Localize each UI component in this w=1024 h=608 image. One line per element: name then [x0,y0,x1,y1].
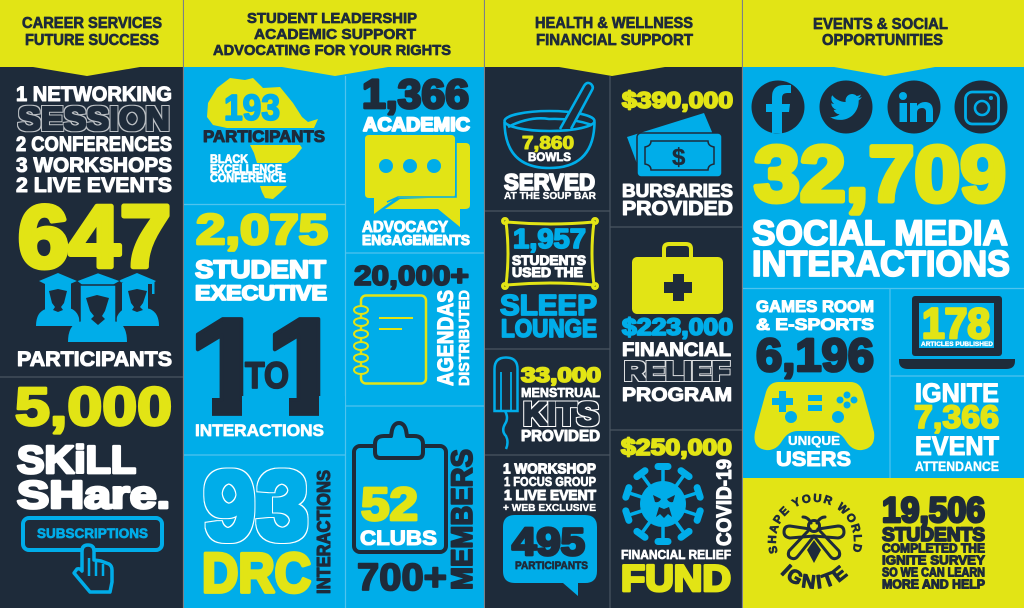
map: africa with black excellence conference: PARTICIPANTS [203,127,325,146]
stat: 6,196 games room: & E-SPORTS [756,315,874,334]
event list [16,82,172,197]
stat: 93 DRC interactions: 93 [203,450,309,561]
icon: virus [626,466,700,542]
stat: 93 DRC interactions: DRC [202,541,311,604]
stat: 93 DRC interactions [202,450,334,604]
stat: 6,196 games room: UNIQUE [788,433,840,448]
stat: soup bar bowls: SERVED [504,169,595,195]
stat: ignite event attendance: IGNITE [915,378,999,408]
text: survey result: MORE AND HELP [882,578,985,592]
stat: soup bar bowls [504,83,596,202]
header: health and wellness [485,0,743,76]
column 2: student leadership [184,0,485,608]
stat: 6,196 games room: GAMES ROOM [756,297,874,316]
button: subscriptions: SUBSCRIPTIONS [37,525,148,541]
icon: tampon [494,358,518,449]
icon: laptop [899,296,1015,369]
stat: 2,075 student executive: EXECUTIVE [195,281,327,305]
icon: facebook [752,80,804,134]
header: events and social: OPPORTUNITIES [822,32,943,49]
logo: shape your world ignite: SHAPE YOUR WORLD [768,494,862,554]
header: student leadership: ADVOCATING FOR YOUR RIGHTS [213,42,451,59]
stat: sleep lounge: LOUNGE [501,315,597,343]
stat: $223,000 financial relief program: $223,000 [622,314,733,341]
event list: 3 WORKSHOPS [16,153,172,177]
stat: $223,000 financial relief program: PROGRAM [622,384,732,406]
stat: 32,709 social media interactions [752,129,1010,284]
stat: ignite event attendance: EVENT [915,431,999,461]
stat: $250,000 covid-19 relief fund: $250,000 [621,434,732,460]
column 1: career services [0,0,184,608]
column 4: events and social [743,0,1024,608]
header: health and wellness: HEALTH & WELLNESS [535,15,693,32]
stat: 1,366 academic advocacy [362,71,470,249]
stat: $250,000 covid-19 relief fund: FUND [621,558,731,599]
icon: clipboard [354,423,446,552]
icon: twitter [820,80,872,134]
stat: 6,196 games room: 6,196 [756,329,874,381]
stat: 1,366 academic advocacy: ENGAGEMENTS [362,233,470,249]
stat: 5,000 skill share [15,377,172,517]
stat: 20,000+ agendas distributed: AGENDAS [433,290,458,386]
icon: graduates [36,273,159,342]
stat: sleep lounge [500,218,598,343]
stat: sleep lounge: 1,957 [513,223,586,254]
stat: 1 to 1 interactions [186,290,345,444]
stat: 495 participants: 1 WORKSHOP [503,462,596,478]
stat: 178 articles published: ARTICLES PUBLISHED [921,341,993,348]
stat: $390,000 bursaries [622,87,733,220]
map: africa with black excellence conference: BLACK [210,154,249,166]
stat: 495 participants: 1 FOCUS GROUP [504,475,596,489]
stat: $250,000 covid-19 relief fund [621,434,736,599]
icon: money bills: $ [672,144,686,171]
stat: 1,366 academic advocacy: 1,366 [362,71,469,117]
stat: 20,000+ agendas distributed: DISTRIBUTED [456,290,473,386]
stat: 5,000 skill share: SKiLL [17,439,136,482]
stat: $390,000 bursaries: $390,000 [622,87,733,113]
stat: $223,000 financial relief program [622,244,733,406]
stat: 2,075 student executive [195,206,328,305]
stat: 20,000+ agendas distributed: 20,000+ [354,260,469,291]
header: career services [0,0,183,76]
event list: 2 CONFERENCES [16,133,172,156]
stat: 6,196 games room [754,297,874,471]
text: survey result: COMPLETED THE [882,542,985,556]
stat: $250,000 covid-19 relief fund: COVID-19 [712,459,736,546]
stat: 1 to 1 interactions: 1 [265,290,345,444]
icon: chat bubbles [365,135,470,227]
column 3: health and wellness [485,0,743,608]
button: subscriptions [23,518,162,550]
stat: 1 to 1 interactions: TO [245,355,289,396]
stat: 1,366 academic advocacy: ACADEMIC [363,115,470,136]
header: health and wellness: FINANCIAL SUPPORT [536,32,694,49]
stat: 52 clubs 700+ members: 700+ [357,557,447,599]
stat: 5,000 skill share: SHare. [17,474,170,517]
stat: 495 participants: 495 [512,521,585,564]
header: student leadership: STUDENT LEADERSHIP [247,10,417,27]
stat: $223,000 financial relief program: FINANCIAL [622,339,731,361]
stat: soup bar bowls: 7,860 [522,133,574,153]
stat: 5,000 skill share: 5,000 [15,377,172,437]
header: student leadership: ACADEMIC SUPPORT [254,26,416,43]
stat: 6,196 games room: USERS [776,447,851,471]
stat: 178 articles published: 178 [922,300,990,348]
stat: 1 to 1 interactions: INTERACTIONS [195,421,324,440]
text: survey result: 19,506 [882,491,985,530]
stat: 495 participants: 1 LIVE EVENT [504,488,596,504]
stat: 52 clubs 700+ members: MEMBERS [446,449,479,590]
stat: 647 participants: 647 [18,187,171,286]
stat: 1,366 academic advocacy: ADVOCACY [362,219,448,236]
icon: notebook [354,296,426,384]
stat: 495 participants: + WEB EXCLUSIVE [503,502,596,514]
label: participants: PARTICIPANTS [17,347,172,371]
stat: 20,000+ agendas distributed [354,260,473,386]
stat: 1 to 1 interactions: 1 [188,290,268,444]
stat: menstrual kits: KITS [523,396,599,432]
stat: 2,075 student executive: STUDENT [195,256,326,284]
header: career services: FUTURE SUCCESS [25,32,159,49]
stat: soup bar bowls: AT THE SOUP BAR [504,190,596,202]
stat: ignite event attendance [914,378,999,474]
header: events and social: EVENTS & SOCIAL [813,16,948,33]
stat: 32,709 social media interactions: INTERACTIONS [752,243,1010,284]
header: events and social [743,0,1024,76]
event list: 1 NETWORKING [16,82,172,106]
header: career services: CAREER SERVICES [22,15,162,32]
stat: menstrual kits [494,358,601,449]
stat: $223,000 financial relief program: RELIEF [624,356,730,386]
stat: $390,000 bursaries: BURSARIES [622,180,733,201]
text: survey result: STUDENTS [882,524,985,546]
stat: menstrual kits: 33,000 [521,363,601,387]
stat: 32,709 social media interactions: SOCIAL MEDIA [752,214,1008,253]
stat: $390,000 bursaries: PROVIDED [622,197,733,220]
stat: ignite event attendance: 7,366 [914,399,999,435]
stat: 52 clubs 700+ members: CLUBS [360,527,437,550]
map: africa with black excellence conference: CONFERENCE [210,173,286,185]
stat: sleep lounge: SLEEP [500,290,597,322]
stat: 93 DRC interactions: INTERACTIONS [313,470,334,594]
stat: sleep lounge: USED THE [512,265,583,280]
stat: sleep lounge: STUDENTS [512,253,586,268]
text: survey result [882,491,985,592]
event list: SESSION [18,101,170,138]
icon: pointing hand [74,545,112,592]
icon: game controller [754,382,874,450]
icon: bowl and spoon [504,83,594,168]
panel: ignite survey [743,478,1024,608]
icon: speech bubble [503,515,597,596]
stat: menstrual kits: PROVIDED [521,428,600,445]
stat: 2,075 student executive: 2,075 [196,206,328,254]
stat: 495 participants [503,462,597,596]
text: survey result: IGNITE SURVEY [882,552,985,568]
stat: 52 clubs 700+ members: 52 [361,478,418,530]
stat: 52 clubs 700+ members [354,423,479,599]
icon: linkedin [888,80,940,134]
text: survey result: SO WE CAN LEARN [882,566,985,580]
stat: menstrual kits: MENSTRUAL [521,386,600,400]
event list: 2 LIVE EVENTS [16,173,172,197]
map: africa with black excellence conference [203,78,325,199]
icon: instagram [954,80,1008,134]
stat: $250,000 covid-19 relief fund: FINANCIAL RELIEF [621,547,731,562]
stat: 495 participants: PARTICIPANTS [515,560,588,572]
logo: shape your world ignite: IGNITE [780,564,848,590]
stat: 178 articles published [899,296,1015,369]
stat: soup bar bowls: BOWLS [528,152,571,164]
stat: 32,709 social media interactions: 32,709 [754,129,1006,218]
stat: ignite event attendance: ATTENDANCE [915,458,999,474]
logo: shape your world ignite [768,494,862,590]
icon: first aid briefcase [632,244,723,314]
header: student leadership [184,0,485,76]
map: africa with black excellence conference: 193 [224,87,280,128]
map: africa with black excellence conference: EXCELLENCE [210,164,282,176]
icon: pillow [502,218,598,288]
